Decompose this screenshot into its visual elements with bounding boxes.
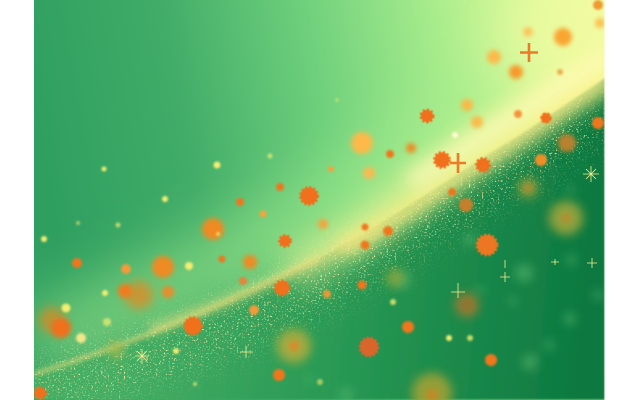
- plus shaped orange marks: [450, 43, 538, 173]
- spiky orange flowers: [34, 110, 550, 398]
- lower green slope: [34, 78, 605, 400]
- wide pale green haze above the diagonal: [34, 30, 620, 345]
- olive blurred halos: [39, 178, 583, 400]
- sharp orange dots: [72, 0, 604, 381]
- gold star sparkles: [135, 166, 599, 364]
- gold glitter speckles: [34, 84, 604, 400]
- top right light glow: [482, 0, 604, 95]
- soft green bokeh: [338, 186, 604, 400]
- glow band along diagonal: [34, 55, 615, 374]
- yellow glowing dots: [41, 98, 473, 386]
